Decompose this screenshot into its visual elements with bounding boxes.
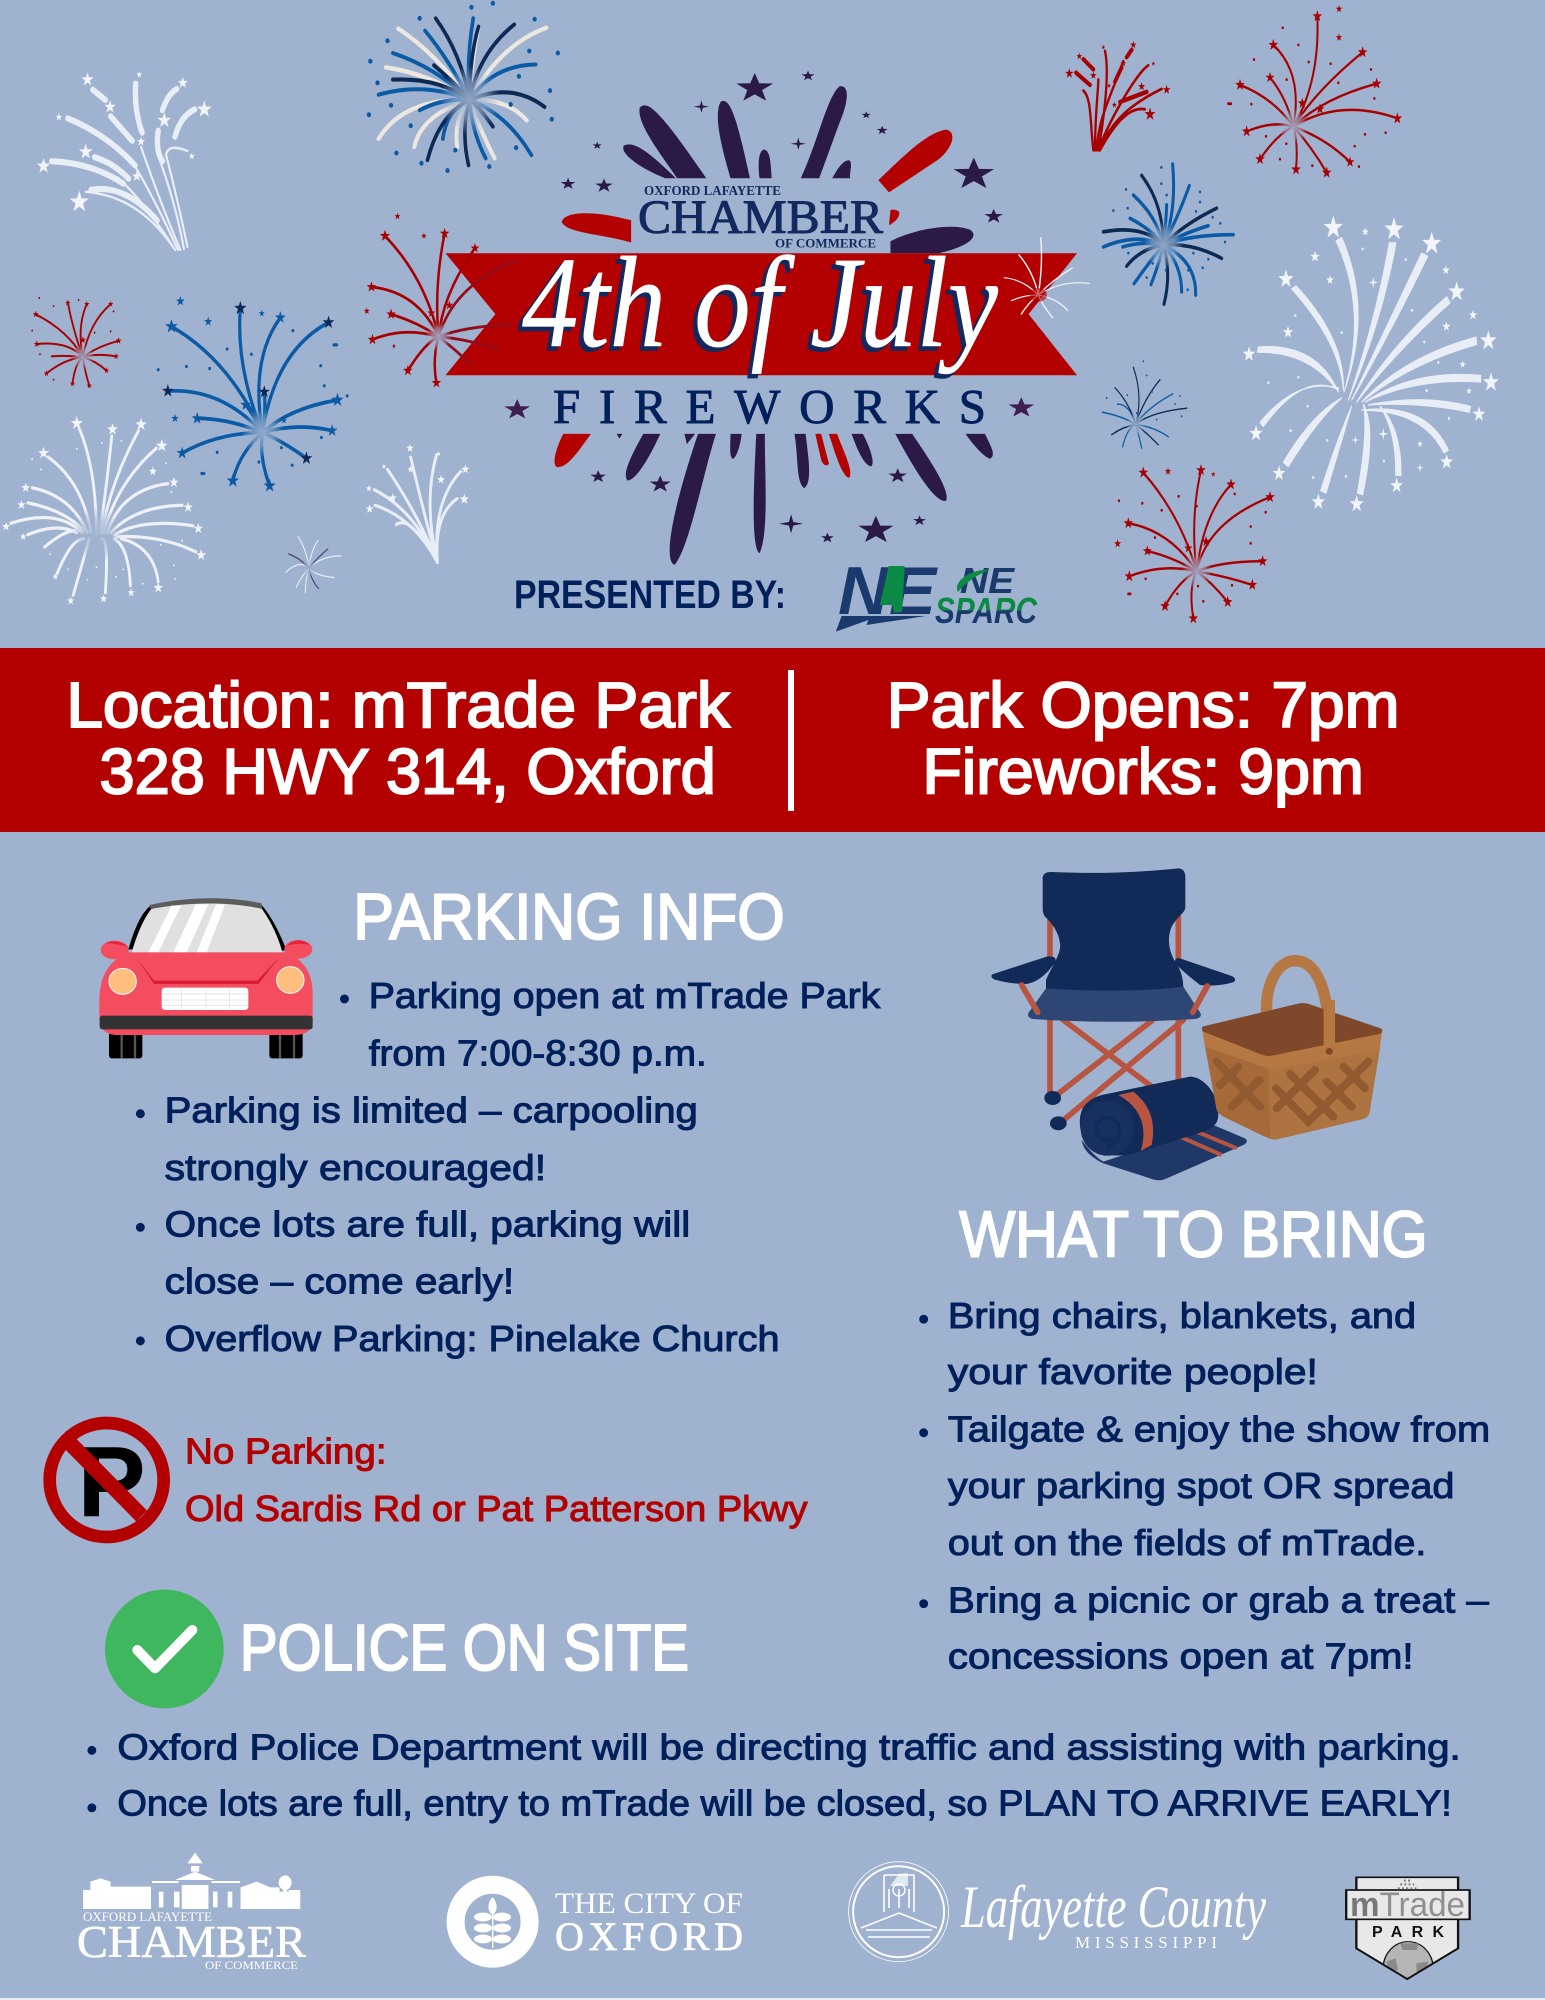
parking bullet list [140, 975, 881, 1359]
firework: navy blue and cream burst top [369, 3, 558, 171]
top stars [561, 71, 1003, 223]
parking bullet list: close – come early! [165, 1261, 514, 1302]
sponsor logo: NE SPARC [935, 560, 1038, 631]
panel: parking info [50, 880, 881, 1539]
bring bullet list: Bring chairs, blankets, and [948, 1295, 1416, 1336]
police bullet list: Once lots are full, entry to mTrade will be closed, so PLAN TO ARRIVE EARLY! [117, 1782, 1452, 1823]
firework: red burst over ribbon [364, 213, 514, 387]
sponsor logo: NE SPARC: SPARC [935, 590, 1038, 631]
police bullet list: Oxford Police Department will be directing traffic and assisting with parking. [117, 1726, 1461, 1767]
logo: oxford lafayette chamber: OXFORD LAFAYETTE [83, 1909, 212, 1924]
parking bullet list: Overflow Parking: Pinelake Church [165, 1318, 780, 1359]
icon: no parking sign [50, 1423, 164, 1539]
firework: red burst top right [1228, 5, 1402, 178]
footer logos [78, 1852, 1471, 1980]
parking bullet list: from 7:00-8:30 p.m. [369, 1032, 707, 1073]
of commerce: OF COMMERCE [775, 236, 876, 250]
icon: no parking sign: P [77, 1427, 146, 1539]
sponsor logo: NE SPARC: NE [960, 560, 1015, 601]
parking bullet list: Once lots are full, parking will [165, 1203, 690, 1244]
firework: red fountain [1065, 41, 1170, 150]
firework: small white burst [286, 537, 341, 593]
location text: Location: mTrade Park [66, 669, 730, 741]
bring bullet list: your favorite people! [948, 1351, 1318, 1392]
bring bullet list: Tailgate & enjoy the show from [948, 1409, 1490, 1450]
logo: oxford lafayette chamber: CHAMBER [77, 1917, 306, 1967]
header fireworks right [1065, 5, 1499, 623]
logo: lafayette county: MISSISSIPPI [1075, 1933, 1217, 1952]
logo: lafayette county: Lafayette County [960, 1874, 1266, 1940]
bring bullet list: your parking spot OR spread [948, 1465, 1454, 1506]
firework: small red burst [32, 298, 122, 388]
presented by: PRESENTED BY: [514, 573, 786, 617]
chamber name small line: OXFORD LAFAYETTE [644, 183, 781, 198]
firework: small blue and navy burst [1102, 361, 1187, 448]
chamber wordmark: CHAMBER [638, 191, 883, 244]
info band [0, 648, 1545, 832]
logo: city of oxford [456, 1885, 743, 1959]
logo: oxford lafayette chamber: OF COMMERCE [205, 1960, 298, 1972]
firework: large white burst bottom left [2, 416, 206, 604]
bring bullet list: concessions open at 7pm! [948, 1636, 1414, 1677]
panel: police on site [92, 1590, 1461, 1823]
firework: red burst bottom right [1114, 464, 1275, 623]
divider [788, 670, 794, 811]
location text: 328 HWY 314, Oxford [100, 736, 716, 808]
parking bullet list: Parking is limited – carpooling [165, 1090, 698, 1131]
heading: police on site: POLICE ON SITE [240, 1611, 689, 1684]
location text [66, 669, 730, 808]
logo: mtrade park [1346, 1877, 1470, 1995]
icon: chair, blanket and picnic basket [991, 868, 1382, 1180]
logo: city of oxford: THE CITY OF [555, 1887, 743, 1920]
firework: white fountain [366, 444, 469, 562]
firework: white fountain top left [37, 71, 212, 250]
top rays [623, 86, 973, 253]
firework: blue burst [158, 296, 347, 492]
panel: what to bring [924, 868, 1490, 1677]
subtitle: fireworks: FIREWORKS [553, 379, 986, 434]
bottom edge line [0, 1998, 1545, 2000]
firework: large white burst right [1243, 216, 1499, 511]
firework: blue burst right [1103, 164, 1233, 304]
logo: mtrade park: mTrade [1350, 1886, 1465, 1924]
hours text: Fireworks: 9pm [922, 736, 1364, 808]
heading: what to bring: WHAT TO BRING [959, 1198, 1428, 1271]
no parking warning: No Parking: [185, 1430, 387, 1471]
heading: parking info: PARKING INFO [353, 880, 785, 953]
hours text: Park Opens: 7pm [887, 669, 1400, 741]
title: 4th of July: 4th of July [522, 231, 998, 375]
parking bullet list: strongly encouraged! [165, 1147, 546, 1188]
logo: mtrade park: PARK [1372, 1924, 1444, 1941]
logo: oxford lafayette chamber [77, 1853, 306, 1972]
title: 4th of July: 4th of July [518, 235, 994, 379]
hours text [887, 669, 1400, 808]
bottom red rays [555, 434, 850, 478]
firework: small white burst on ribbon tail [1004, 238, 1089, 318]
police bullet list [92, 1726, 1461, 1823]
bottom rays [617, 434, 993, 565]
banner ribbon [445, 253, 1077, 375]
red rays [562, 130, 952, 242]
no parking warning: Old Sardis Rd or Pat Patterson Pkwy [185, 1488, 808, 1529]
logo: lafayette county [849, 1862, 1266, 1962]
bring bullet list [924, 1295, 1490, 1677]
side stars [504, 397, 1034, 418]
bottom stars [590, 468, 926, 542]
logo: city of oxford: OXFORD [555, 1914, 743, 1959]
parking bullet list: Parking open at mTrade Park [369, 975, 881, 1016]
icon: red car [99, 898, 313, 1058]
bring bullet list: out on the fields of mTrade. [948, 1522, 1426, 1563]
bring bullet list: Bring a picnic or grab a treat – [948, 1580, 1490, 1621]
no parking warning [185, 1430, 808, 1529]
header fireworks left [2, 3, 558, 604]
icon: green check [105, 1590, 224, 1708]
firework emblem rays and stars [445, 71, 1089, 565]
sponsor logo: NE: NE [838, 553, 939, 629]
chamber logo top [638, 183, 883, 250]
